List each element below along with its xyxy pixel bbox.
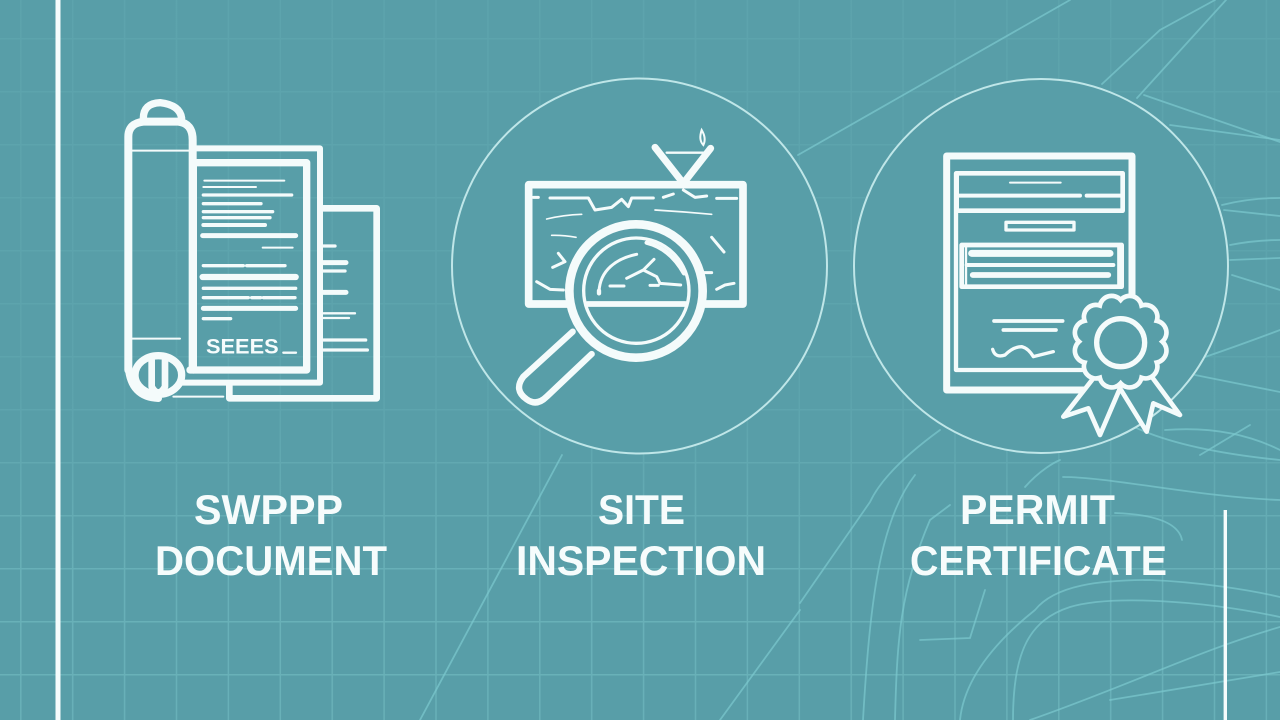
panel: SWPPP document — [128, 103, 387, 584]
label: permit certificate — [910, 486, 1167, 584]
label: SWPPP document: SWPPP — [194, 486, 343, 533]
left vertical rule — [56, 0, 60, 720]
label: SWPPP document: DOCUMENT — [155, 537, 387, 584]
label: site inspection: INSPECTION — [516, 537, 766, 584]
label: site inspection — [516, 486, 766, 584]
background: blueprint sketch lines — [420, 0, 1280, 720]
panel: permit certificate — [854, 79, 1228, 584]
panel: site inspection — [452, 78, 827, 584]
circle: site inspection — [452, 78, 827, 454]
icon: SWPPP document scroll: SEEES — [206, 334, 279, 358]
label: permit certificate: CERTIFICATE — [910, 537, 1167, 584]
label: SWPPP document — [155, 486, 387, 584]
icon: certificate with rosette — [947, 156, 1180, 435]
label: permit certificate: PERMIT — [960, 486, 1115, 533]
right vertical rule — [1224, 510, 1227, 720]
icon: magnifier over cracked ground — [519, 130, 743, 402]
label: site inspection: SITE — [598, 486, 685, 533]
circle: permit certificate — [854, 79, 1228, 453]
icon: SWPPP document scroll — [128, 103, 377, 398]
